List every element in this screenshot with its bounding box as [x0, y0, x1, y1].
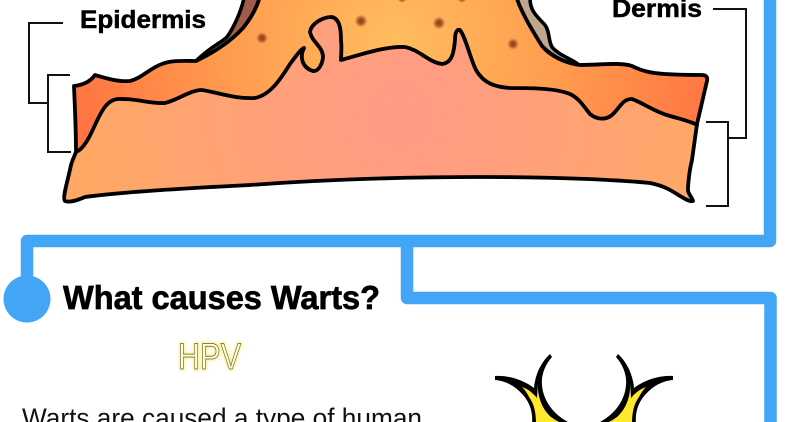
boundary line between layers [76, 17, 697, 152]
skin outline [64, 0, 707, 202]
brown skin wedge, left [197, 0, 263, 60]
blue connector: lower [407, 241, 770, 422]
heading marker circle [4, 276, 50, 322]
pigment dots [256, 0, 519, 50]
label: Epidermis: Epidermis [80, 6, 206, 34]
epidermis layer [74, 0, 707, 160]
virus left lobe [495, 354, 568, 422]
heading: What causes Warts? [63, 279, 380, 316]
HPV outlined title: HPV [178, 336, 241, 377]
HPV outlined title: HPV [178, 336, 241, 377]
virus right lobe [600, 354, 673, 422]
skin cross-section diagram [64, 0, 707, 202]
virus illustration [495, 354, 673, 422]
bracket: dermis [706, 9, 746, 206]
blue connector: upper [27, 0, 770, 295]
tan skin wedge, right [514, 0, 579, 65]
bracket: epidermis [29, 23, 71, 152]
dermis layer [64, 17, 697, 202]
